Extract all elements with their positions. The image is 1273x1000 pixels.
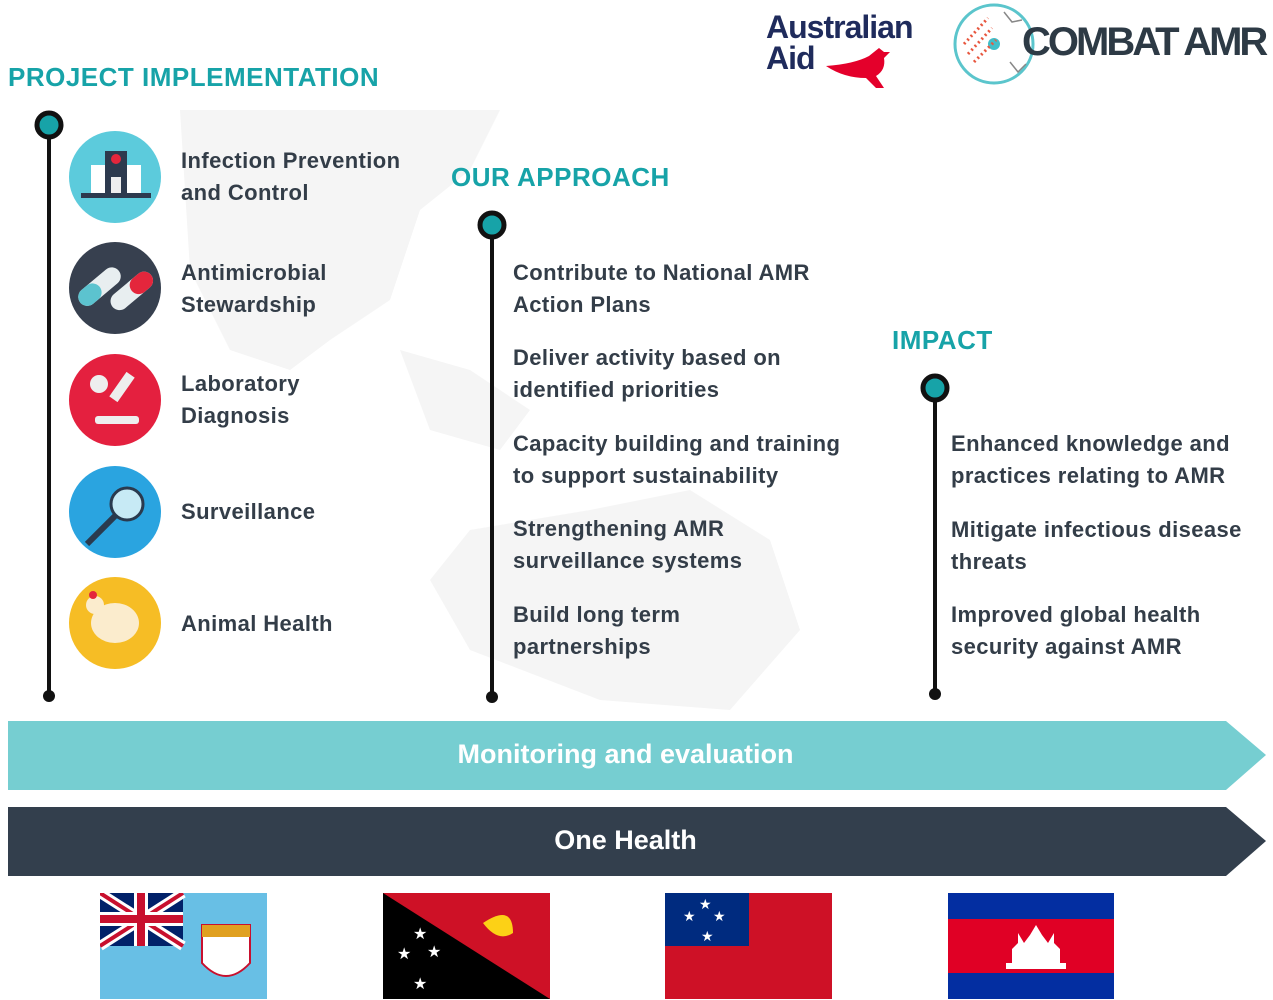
list: approach items: Contribute to National AMR xyxy=(513,260,810,285)
banner: monitoring and evaluation xyxy=(8,721,1266,790)
icon: microscope xyxy=(69,354,161,446)
text: laboratory diagnosis: Diagnosis xyxy=(181,403,290,428)
flag: Papua New Guinea: ★ xyxy=(397,946,411,963)
logo: Australian Aid: Australian xyxy=(766,9,912,45)
list: approach items xyxy=(513,260,840,659)
text: antimicrobial stewardship: Antimicrobial xyxy=(181,260,327,285)
list: impact items: threats xyxy=(951,549,1027,574)
icon: surveillance xyxy=(69,466,161,558)
logo: COMBAT AMR: COMBAT AMR xyxy=(1022,20,1265,64)
text: infection prevention: and Control xyxy=(181,180,309,205)
banner: monitoring and evaluation: Monitoring and evaluation xyxy=(458,739,794,769)
text: animal health: Animal Health xyxy=(181,611,333,636)
timeline: implementation xyxy=(34,110,64,702)
text: surveillance: Surveillance xyxy=(181,499,315,524)
banner: one health xyxy=(8,807,1266,876)
logo: COMBAT AMR xyxy=(954,4,1268,84)
text: antimicrobial stewardship: Stewardship xyxy=(181,292,316,317)
icon: hospital xyxy=(69,131,161,223)
logo: Australian Aid xyxy=(766,9,912,88)
list: approach items: Build long term xyxy=(513,602,680,627)
flag: Papua New Guinea: ★ xyxy=(413,926,427,943)
flag: Fiji xyxy=(100,893,267,999)
list: approach items: Deliver activity based on xyxy=(513,345,781,370)
list: impact items: security against AMR xyxy=(951,634,1182,659)
text: antimicrobial stewardship xyxy=(181,260,327,317)
icon: chicken xyxy=(69,577,161,669)
icon: pills xyxy=(69,242,161,334)
text: infection prevention: Infection Prevention xyxy=(181,148,400,173)
flag: Samoa xyxy=(665,893,832,999)
list: approach items: identified priorities xyxy=(513,377,719,402)
text: laboratory diagnosis xyxy=(181,371,300,428)
timeline: impact xyxy=(920,374,950,700)
list: approach items: surveillance systems xyxy=(513,548,742,573)
heading: our approach: OUR APPROACH xyxy=(451,162,670,192)
list: approach items: Strengthening AMR xyxy=(513,516,724,541)
list: impact items: practices relating to AMR xyxy=(951,463,1225,488)
background map xyxy=(180,110,800,710)
flag: Samoa: ★ xyxy=(701,928,714,944)
banner: one health: One Health xyxy=(554,825,697,855)
list: impact items xyxy=(951,431,1242,659)
heading: impact: IMPACT xyxy=(892,325,993,355)
list: approach items: partnerships xyxy=(513,634,651,659)
text: infection prevention xyxy=(181,148,400,205)
flag: Papua New Guinea: ★ xyxy=(413,976,427,993)
timeline: approach xyxy=(478,210,506,703)
list: approach items: to support sustainability xyxy=(513,463,778,488)
list: approach items: Action Plans xyxy=(513,292,651,317)
text: laboratory diagnosis: Laboratory xyxy=(181,371,300,396)
flag: Samoa: ★ xyxy=(713,908,726,924)
list: approach items: Capacity building and training xyxy=(513,431,840,456)
flag: Cambodia xyxy=(948,893,1114,999)
flag: Papua New Guinea xyxy=(383,893,550,999)
title: project implementation: PROJECT IMPLEMENTATION xyxy=(8,62,379,92)
list: impact items: Enhanced knowledge and xyxy=(951,431,1230,456)
flag: Samoa: ★ xyxy=(699,896,712,912)
list: impact items: Mitigate infectious disease xyxy=(951,517,1242,542)
logo: Australian Aid: Aid xyxy=(766,40,815,76)
flag: Papua New Guinea: ★ xyxy=(427,944,441,961)
flag: Samoa: ★ xyxy=(683,908,696,924)
list: impact items: Improved global health xyxy=(951,602,1201,627)
